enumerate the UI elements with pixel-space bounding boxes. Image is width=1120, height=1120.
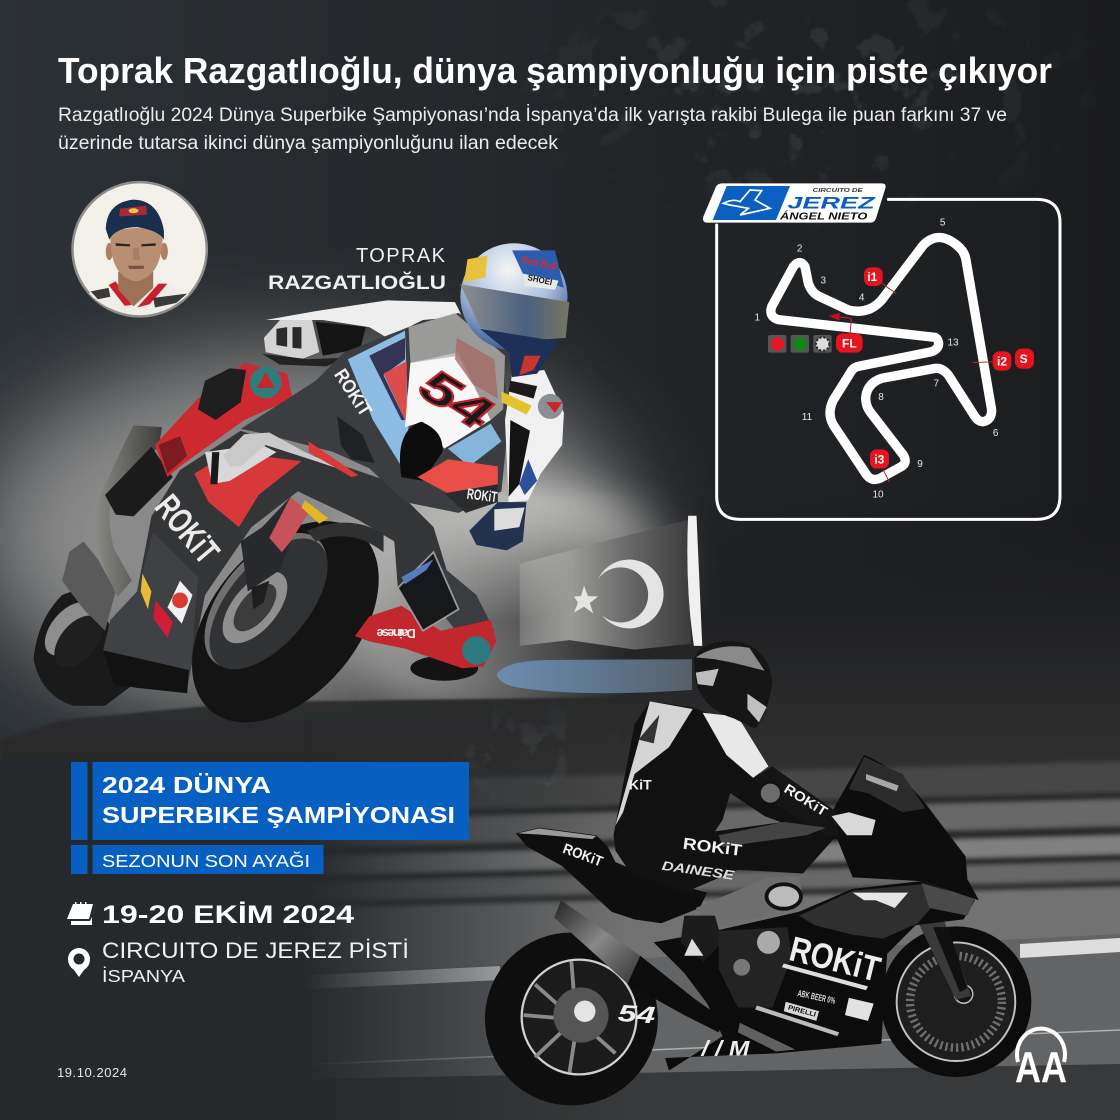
circuit logo: ÁNGEL NIETO [779,212,868,223]
race track [771,237,992,479]
black and white motorcycle photo: rider carrying the flag: DAINESE [661,858,735,883]
black and white motorcycle photo: rider carrying the flag: ROKiT [781,781,830,819]
subtitle [58,105,1007,154]
timing badges: i1 [867,270,878,284]
helmet [694,641,772,729]
main bodywork [654,881,975,1071]
rear tyre [34,584,134,706]
Turkish flag [497,516,702,693]
subtitle: üzerinde tutarsa ikinci dünya şampiyonluğunu ilan edecek [58,133,559,154]
timing badges: S [1020,352,1028,366]
black and white motorcycle photo: rider carrying the flag: ABK BEER 0% [797,988,836,1006]
rider arm and gloves [266,300,462,338]
spotlight glow behind the rider [0,350,690,720]
venue: CIRCUITO DE JEREZ PİSTİ [102,938,409,963]
motorcycle photo: Razgatlıoğlu leaning into a corner [34,243,569,758]
corner numbers: 10 [872,489,884,500]
timing badges: i2 [997,354,1007,368]
AA logo: AA [1015,1043,1067,1092]
number plate 54: 54 [617,1001,656,1029]
rider sponsor text: ROKiT [682,835,743,860]
front wheel [881,926,1031,1077]
flag pole [687,516,702,646]
corner numbers: 11 [802,412,813,423]
black and white motorcycle photo: rider carrying the flag: / / M [700,1036,751,1060]
lower leg [434,559,494,634]
corner numbers: 1 [755,313,761,324]
boot and leg [105,447,173,516]
event date: 19-20 EKİM 2024 [102,901,354,929]
black and white motorcycle photo: rider carrying the flag: KiT [629,777,652,792]
rear wheel [485,932,658,1105]
photo background: grandstand stripes and road [316,508,1120,1120]
season label: SEZONUN SON AYAĞI [102,850,310,871]
corner numbers: 3 [821,275,827,286]
AA logo [1015,1029,1067,1092]
timing badges: FL [842,337,857,351]
icon: location pin [68,948,90,977]
winglet and headlight [223,432,359,475]
timing badges [836,267,1034,469]
circuit logo: CIRCUITO DE [813,188,863,194]
black and white motorcycle photo: rider carrying the flag: PIRELLI [787,1005,817,1019]
corner numbers [755,217,999,500]
subtitle: Razgatlıoğlu 2024 Dünya Superbike Şampiyonası’nda İspanya’da ilk yarışta rakibi Bulega ile puan farkını 37 ve [58,105,1007,126]
crescent [598,560,664,628]
side sponsor: ROKiT [786,930,885,990]
timing badges: i3 [874,452,885,466]
championship heading: 2024 DÜNYA [102,772,271,798]
corner numbers: 13 [947,338,959,349]
sector lines [850,283,997,482]
rider name [268,245,446,294]
venue [102,938,409,986]
front tyre [155,486,416,758]
motorcycle photo: Razgatlıoğlu leaning into a corner: SHOEI [527,272,553,287]
corner numbers: 2 [797,244,803,255]
title: Toprak Razgatlıoğlu, dünya şampiyonluğu için piste çıkıyor [58,50,1052,91]
windscreen and nose [832,755,979,900]
tail text: ROKiT [147,487,227,572]
corner numbers: 6 [993,428,999,439]
corner numbers: 4 [859,293,865,304]
fairing side [398,552,459,631]
blue kerb on ground [497,659,692,693]
front fork [918,921,971,1000]
portrait: Toprak Razgatlıoğlu [72,182,207,316]
map frame [717,199,1060,519]
black and white motorcycle photo: rider carrying the flag [485,641,1031,1105]
exhaust [94,425,162,597]
venue: İSPANYA [102,966,185,986]
background [0,0,960,741]
boot [680,916,723,962]
star [574,586,598,613]
corner numbers: 9 [917,459,923,470]
season label [71,845,324,874]
corner numbers: 5 [940,217,946,228]
lower glove [469,502,526,550]
helmet [460,243,567,350]
motorcycle photo: Razgatlıoğlu leaning into a corner: Dainese [376,626,416,641]
circuit map panel [703,183,1060,519]
rear bodywork [103,431,459,670]
right torso [505,370,564,502]
motorcycle photo: Razgatlıoğlu leaning into a corner: Red Bull [520,254,558,273]
rider name: TOPRAK [356,245,446,267]
rider suit [613,701,841,893]
rider name: RAZGATLIOĞLU [268,272,446,294]
thigh [696,877,803,927]
asphalt under the rider [0,697,602,1120]
icon: calendar [67,902,93,925]
motorcycle photo: Razgatlıoğlu leaning into a corner: ROKiT [466,486,498,506]
circuit logo: JEREZ [787,193,876,212]
number 54 on the fairing: 54 [411,358,501,441]
flag markers [768,335,832,353]
direction arrow [829,313,851,321]
circuit logo [703,183,886,223]
windshield [409,313,505,420]
engine [719,927,791,1007]
corner numbers: 7 [934,379,940,390]
seat and tail [516,828,707,923]
tail sponsor: ROKiT [560,841,605,870]
fairing sponsor: ROKiT [329,366,375,421]
corner numbers: 8 [878,392,884,403]
main fairing [241,313,509,513]
exhaust [554,900,640,984]
date: 19.10.2024 [57,1065,127,1080]
side red fairing [194,452,301,527]
championship heading [71,762,469,840]
championship heading: SUPERBIKE ŞAMPİYONASI [102,802,455,828]
